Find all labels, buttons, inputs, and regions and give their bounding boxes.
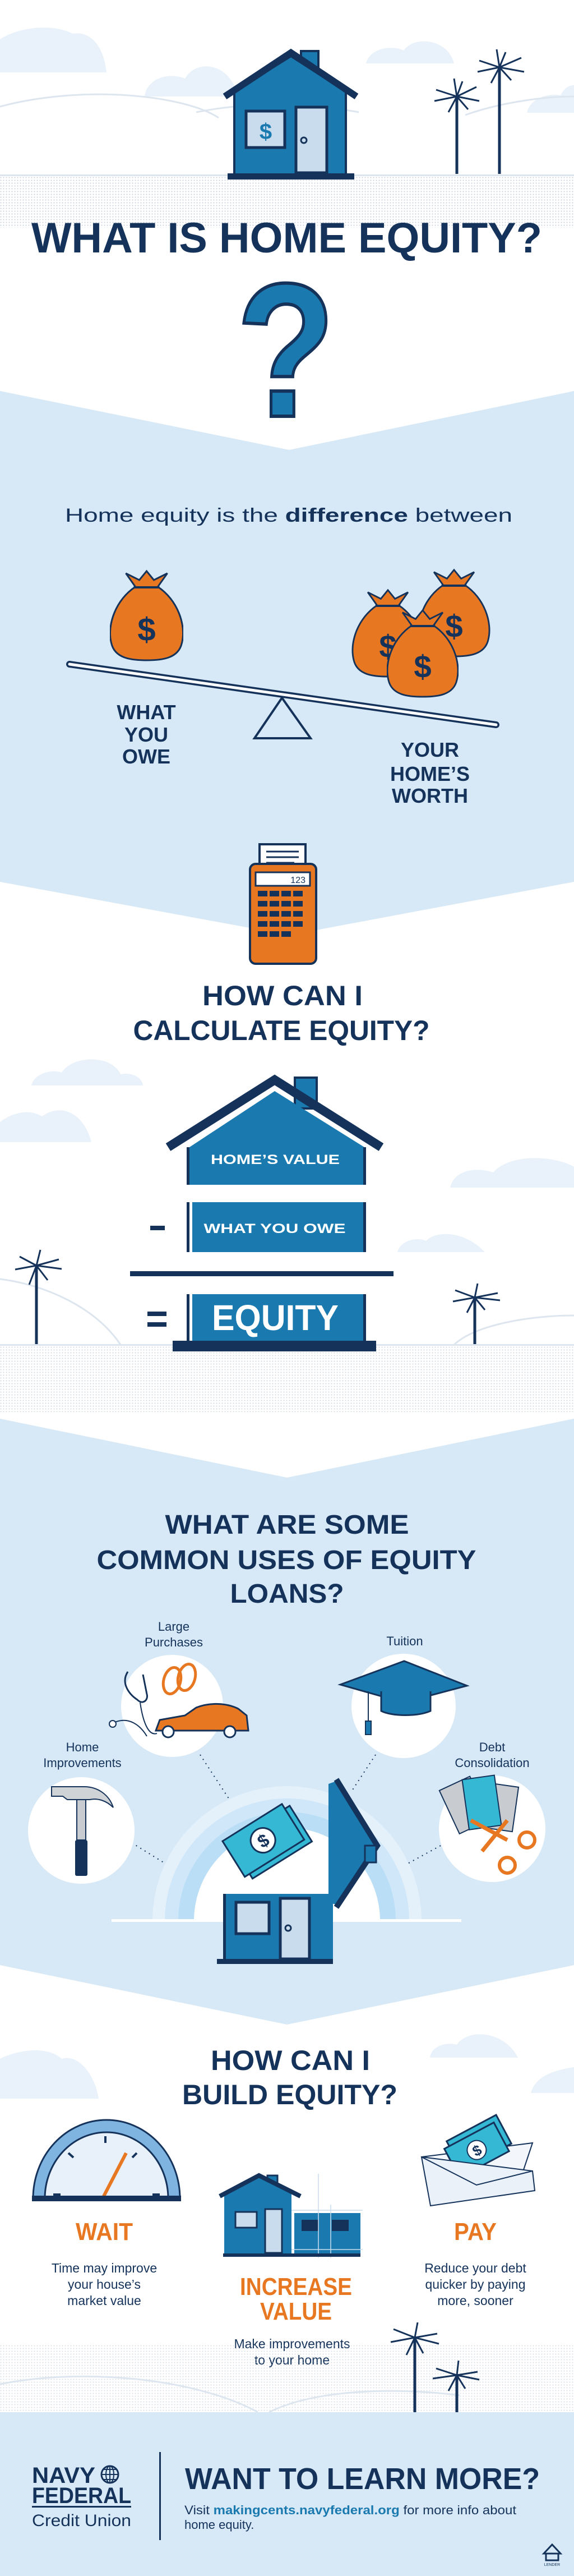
- hills 2: [0, 1279, 574, 1345]
- ground stipple band 2: [0, 1345, 574, 1412]
- heading: calculate equity: HOW CAN I: [202, 980, 363, 1011]
- symbol: minus: [150, 1226, 165, 1230]
- icon: house with money: $: [254, 1829, 273, 1852]
- icon: single money bag: [110, 571, 183, 660]
- label: debt consolidation: Consolidation: [455, 1756, 530, 1770]
- symbol: equals: [147, 1312, 166, 1327]
- icon: house with extension: [220, 2174, 363, 2258]
- panel: footer: [0, 2412, 574, 2576]
- panel: difference section background: [0, 391, 574, 935]
- box: what you owe: [187, 1202, 366, 1252]
- icon: equal housing lender: LENDER: [544, 2563, 560, 2567]
- icon circle: large purchases: [109, 1655, 248, 1757]
- text: increase description: Make improvements: [234, 2336, 350, 2351]
- icon: palm trees bottom: [391, 2322, 479, 2412]
- heading: common uses: LOANS?: [230, 1579, 344, 1609]
- label: what you owe: WHAT: [117, 701, 176, 724]
- background: top clouds: [0, 27, 574, 113]
- logo: navy federal: [32, 2463, 131, 2530]
- chart: equity formula house: [168, 1078, 381, 1185]
- box: what you owe: WHAT YOU OWE: [204, 1221, 345, 1236]
- label: what you owe: YOU: [124, 723, 168, 746]
- text: pay description: more, sooner: [437, 2293, 513, 2308]
- logo: navy federal: Credit Union: [32, 2511, 131, 2530]
- label: your home's worth: YOUR: [401, 738, 459, 761]
- text: visit link: Visit makingcents.navyfederal.org for more info about: [184, 2503, 507, 2517]
- text: wait description: your house’s: [68, 2277, 141, 2292]
- label: what you owe: OWE: [122, 745, 170, 768]
- icon: top house: [225, 51, 357, 180]
- label: home's value: HOME’S VALUE: [211, 1152, 340, 1167]
- subtitle: Home equity is the difference between: [65, 505, 512, 526]
- icon circle: debt consolidation: [439, 1775, 545, 1882]
- heading: build equity: HOW CAN I: [211, 2045, 370, 2076]
- label: large purchases: Purchases: [145, 1635, 203, 1649]
- icon: equal housing lender: [544, 2545, 561, 2567]
- logo: navy federal: FEDERAL: [32, 2483, 131, 2508]
- icon: three money bags: [353, 570, 489, 697]
- dotted connectors: [132, 1755, 441, 1868]
- icon: calculator: 123: [290, 876, 305, 885]
- label: pay: PAY: [454, 2218, 497, 2246]
- background: bottom clouds: [0, 2034, 574, 2099]
- icon: envelope with money: $: [469, 2141, 485, 2160]
- heading: calculate equity: CALCULATE EQUITY?: [133, 1015, 429, 1046]
- logo: navy federal: NAVY: [32, 2463, 95, 2488]
- label: your home's worth: HOME’S: [390, 762, 470, 785]
- box: equity: EQUITY: [212, 1298, 339, 1338]
- heading: common uses: COMMON USES OF EQUITY: [96, 1545, 476, 1575]
- text: wait description: market value: [67, 2293, 141, 2308]
- icon: gauge: [32, 2120, 181, 2201]
- background: mid clouds: [0, 1059, 574, 1252]
- text: visit link: home equity.: [184, 2518, 254, 2532]
- icon: palm trees top: [434, 49, 524, 174]
- icon: envelope with money: [422, 2115, 535, 2206]
- heading: common uses: WHAT ARE SOME: [165, 1510, 409, 1540]
- icon: palm trees calc: [15, 1250, 500, 1344]
- icon: house with money: [217, 1779, 377, 1964]
- label: wait: WAIT: [76, 2218, 133, 2246]
- label: tuition: Tuition: [386, 1634, 423, 1648]
- heading: build equity: BUILD EQUITY?: [182, 2079, 397, 2110]
- text: pay description: quicker by paying: [425, 2277, 526, 2292]
- rainbow arcs: [112, 1786, 461, 1922]
- ground stipple band 3: [0, 2345, 574, 2412]
- label: your home's worth: WORTH: [392, 784, 468, 807]
- text: wait description: Time may improve: [52, 2261, 157, 2275]
- divider line: [130, 1271, 394, 1276]
- divider: [159, 2452, 161, 2540]
- icon: top house: $: [260, 119, 272, 144]
- icon: seesaw: [70, 664, 496, 738]
- label: debt consolidation: Debt: [479, 1740, 505, 1754]
- label: increase value: INCREASE: [240, 2273, 352, 2301]
- heading: want to learn more: WANT TO LEARN MORE?: [185, 2462, 540, 2496]
- text: pay description: Reduce your debt: [424, 2261, 526, 2275]
- icon circle: home improvements: [28, 1777, 135, 1884]
- ground stipple band: [0, 174, 574, 228]
- icon: calculator: [250, 844, 316, 964]
- box: equity: [173, 1294, 376, 1351]
- hills: [0, 94, 574, 118]
- icon: question mark: ?: [237, 243, 335, 457]
- icon circle: tuition: [340, 1654, 467, 1758]
- panel: uses section background: [0, 1419, 574, 2025]
- label: home improvements: Home: [66, 1740, 99, 1754]
- title: WHAT IS HOME EQUITY?: [31, 214, 542, 262]
- text: increase description: to your home: [254, 2353, 330, 2367]
- label: home improvements: Improvements: [43, 1756, 122, 1770]
- label: large purchases: Large: [158, 1620, 189, 1634]
- label: increase value: VALUE: [260, 2298, 332, 2325]
